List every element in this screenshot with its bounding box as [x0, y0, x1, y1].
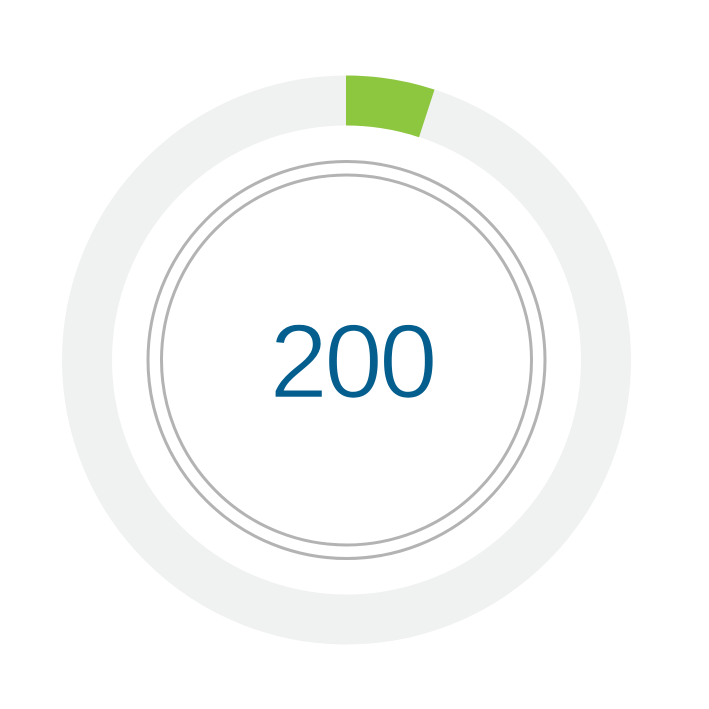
gauge track ring — [87, 100, 606, 620]
outer thin ring — [148, 162, 545, 558]
gauge progress segment — [346, 75, 434, 137]
center value: 200 — [270, 304, 434, 420]
inner thin ring — [162, 175, 532, 545]
